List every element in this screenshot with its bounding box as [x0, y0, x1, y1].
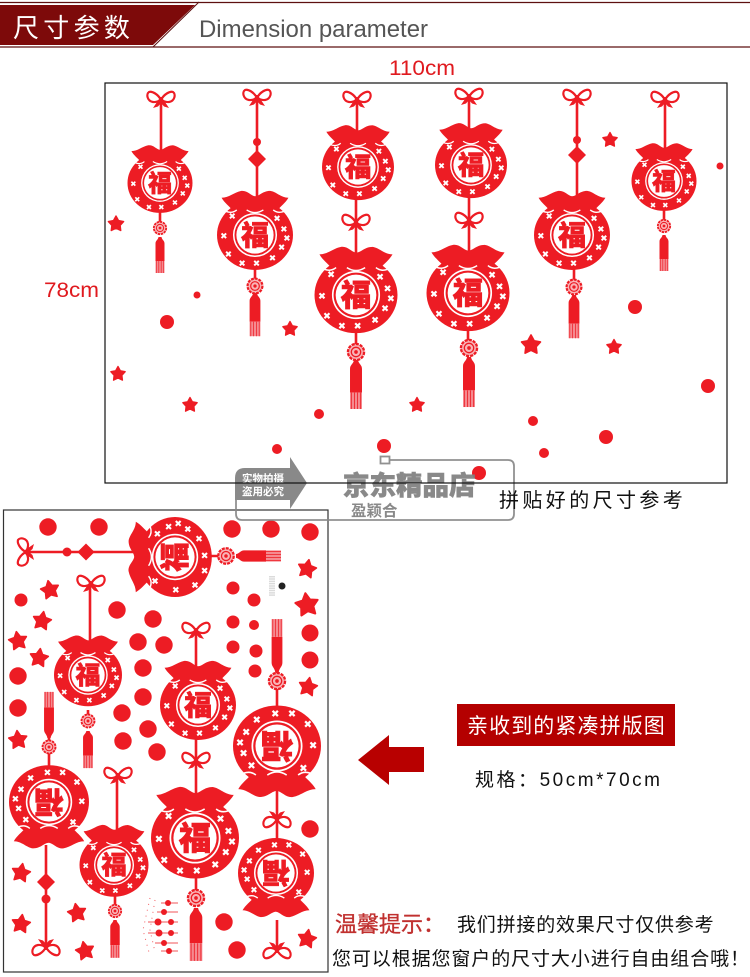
dots — [9, 518, 319, 959]
inverted bag F: 福 — [34, 783, 64, 826]
hanging bag G — [80, 768, 148, 958]
hanger 1 — [128, 92, 192, 273]
header banner: 尺寸参数 — [13, 13, 134, 43]
watermark — [235, 456, 514, 520]
hanging bag G: 福 — [101, 845, 127, 882]
hanger 5: 福 — [558, 213, 586, 254]
hanging bags B and C: 福 — [184, 683, 212, 724]
height label: 78cm — [44, 279, 99, 302]
size specification: 规格：50cm*70cm — [475, 769, 660, 791]
hanging bag A: 福 — [75, 656, 101, 692]
watermark: 实物拍摄 — [242, 472, 284, 485]
heading box: compact sheet — [457, 704, 675, 746]
hanger 3: 福 — [341, 270, 371, 315]
sideways bag with tassel — [18, 517, 281, 597]
tip text: 您可以根据您窗户的尺寸大小进行自由组合哦！ — [332, 948, 750, 970]
hanger 2: 福 — [241, 213, 269, 254]
stars — [7, 558, 319, 960]
tiny care mark — [270, 576, 286, 596]
panel: compact sheet — [4, 510, 328, 972]
tip text — [332, 912, 750, 970]
hanger 4 — [426, 89, 510, 407]
hanger 3 — [314, 92, 398, 409]
hanger 6 — [632, 92, 696, 271]
sideways bag with tassel: 福 — [151, 542, 194, 572]
panel: assembled size — [105, 83, 727, 483]
hanging bags B and C: 福 — [179, 812, 211, 859]
inverted bags D and E: 福 — [261, 725, 293, 772]
watermark: 京东精品店 — [343, 471, 476, 501]
scattered dots — [160, 162, 724, 480]
heading box: compact sheet: 亲收到的紧凑拼版图 — [467, 715, 666, 738]
tip text: 我们拼接的效果尺寸仅供参考 — [457, 914, 714, 936]
watermark: 盈颖合 — [351, 501, 398, 520]
hanger 1: 福 — [148, 163, 172, 198]
header banner — [0, 2, 750, 47]
hanger 4: 福 — [453, 268, 483, 313]
inverted bags D and E — [233, 619, 321, 958]
arrow pointing left — [358, 735, 424, 785]
hanger 3: 福 — [345, 145, 371, 184]
caption: assembled size reference: 拼贴好的尺寸参考 — [499, 489, 686, 512]
hanging bag A — [54, 576, 122, 768]
tip text: 温馨提示： — [335, 912, 445, 937]
hanger 4: 福 — [458, 143, 484, 182]
inverted bag F — [9, 692, 89, 955]
watermark arrow — [235, 457, 307, 509]
mini ornaments cluster — [143, 898, 178, 956]
hanger 5 — [534, 90, 610, 338]
inverted bags D and E: 福 — [262, 854, 290, 895]
width label: 110cm — [389, 57, 455, 80]
header banner: Dimension parameter — [199, 16, 428, 43]
hanger 2 — [217, 90, 293, 336]
scattered stars — [108, 132, 621, 411]
panel border: assembled size — [105, 83, 727, 483]
hanger 6: 福 — [652, 161, 676, 196]
watermark: 盗用必究 — [242, 485, 284, 498]
hanging bags B and C — [151, 623, 239, 961]
